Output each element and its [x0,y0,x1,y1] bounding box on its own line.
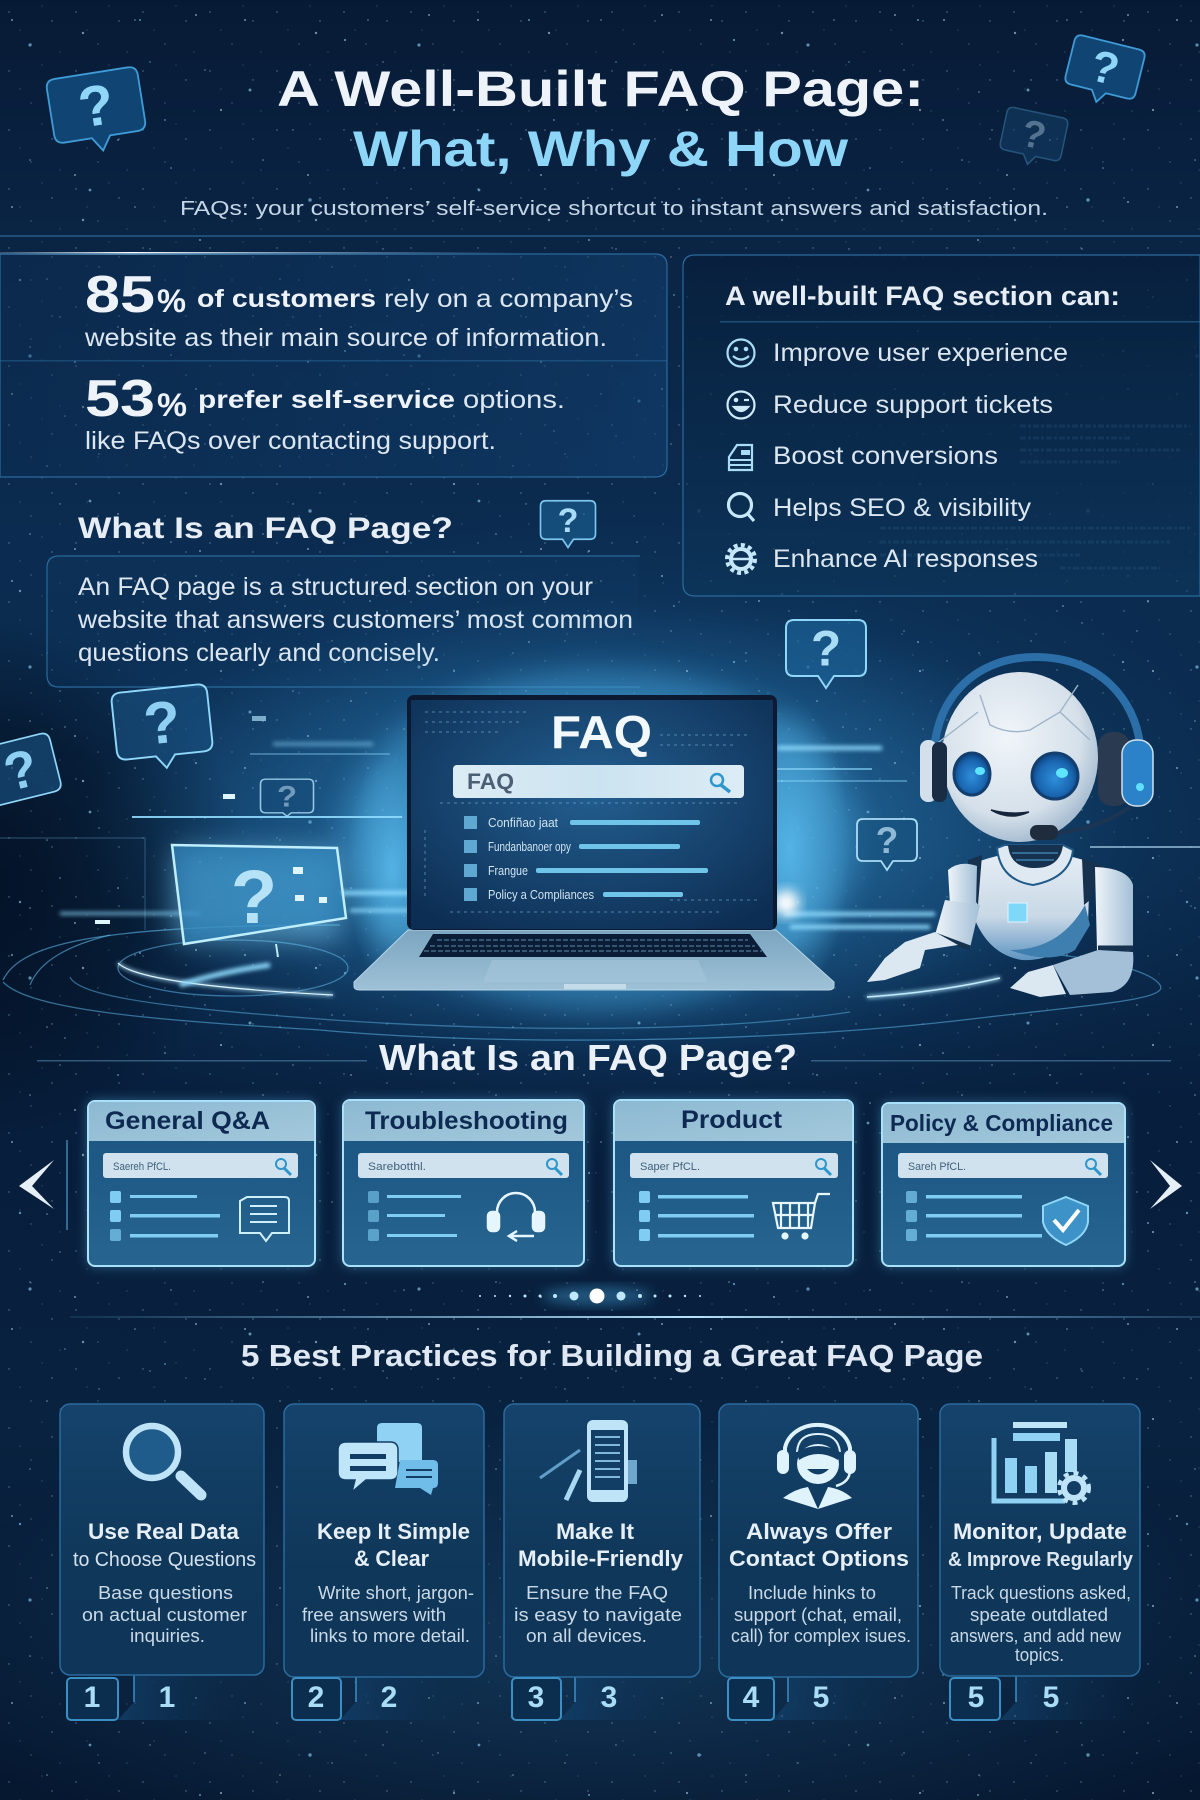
card search [630,1153,838,1178]
practice description: speate outdlated [970,1605,1108,1625]
benefit: AI responses: Enhance AI responses [773,545,1038,573]
practice 5: monitor and update [940,1404,1140,1720]
laptop screen [407,695,777,930]
icon: chart and gear [994,1422,1089,1503]
practice title: Make It [556,1519,635,1544]
practice description: inquiries. [130,1626,205,1646]
card title: General Q&A [105,1107,270,1135]
title: What, Why & How [353,121,848,177]
stat: 53 percent: options. [463,386,565,414]
practice 1: use real data [60,1404,264,1720]
icon: chat [240,1197,289,1241]
card: Policy & Compliance [882,1103,1125,1266]
card search: Saereh PfCL. [113,1161,171,1173]
hero light streaks [60,670,1200,1010]
icon: glass question screen [172,845,346,957]
FAQ list: Frangue [488,863,528,878]
icon: smile [728,340,754,366]
practice card [60,1404,264,1675]
icon: question bubble near robot: ? [876,819,898,861]
number tab: 2 [381,1681,397,1714]
practice description [82,1583,247,1646]
benefit: user experience: Improve user experience [773,339,1068,367]
icon: question bubble small [540,501,596,548]
card title: Policy & Compliance [890,1110,1113,1136]
search bar [453,765,744,798]
FAQ list: Fundanbanoer opy [488,839,571,854]
card search: Saper PfCL. [640,1161,700,1173]
practice title: Keep It Simple [317,1519,470,1544]
card: Troubleshooting [343,1100,584,1266]
practice 3: mobile friendly [504,1404,700,1720]
icon: magnifier [728,494,754,521]
number badge [67,1678,118,1720]
title [277,61,924,177]
stat: 53 percent [85,370,565,455]
number badge [728,1678,774,1720]
heading: what is an FAQ page, section: What Is an FAQ Page? [379,1037,797,1078]
card list [639,1191,754,1241]
panel: FAQ definition [47,556,640,687]
stat: 85 percent: rely on a company’s [384,285,633,313]
icon: question bubble top left [46,66,149,158]
icon: question bubble mid right [786,620,866,688]
stat: 85 percent: % [157,283,186,319]
icon: gear [727,545,755,573]
heading: best practices: 5 Best Practices for Building a Great FAQ Page [241,1338,983,1373]
number tab: 5 [813,1681,829,1714]
practice description [731,1583,911,1646]
icon: happy face [728,392,754,418]
stat: 85 percent: of customers [197,285,376,313]
card title: Product [681,1106,783,1134]
stat: 53 percent: prefer self-service [198,386,455,414]
number tab [118,1675,264,1720]
practice card [719,1404,918,1677]
card: Product [614,1100,853,1266]
panel: benefits [683,255,1200,596]
practice subtitle: & Improve Regularly [948,1549,1134,1571]
practice description: on actual customer [82,1605,247,1625]
number badge: 3 [528,1681,544,1714]
practice description [950,1583,1131,1665]
practice 2: keep it simple [284,1404,484,1720]
number badge: 2 [308,1681,324,1714]
practice description: is easy to navigate [514,1605,682,1625]
robot torso and arms [935,845,1133,995]
practice description [514,1583,682,1646]
card search [898,1153,1108,1178]
icon: dim question bubble top right [997,106,1069,171]
carousel dots [479,1287,701,1305]
arrow: next [1150,1160,1182,1209]
laptop [354,695,834,990]
search bar: FAQ [467,769,514,794]
heading: what is an FAQ page, small: What Is an FAQ Page? [78,512,453,545]
number tab: 1 [159,1681,175,1714]
practice description: Ensure the FAQ [526,1583,668,1603]
number tab [773,1676,918,1720]
icon: question bubble near robot [857,819,917,870]
practice subtitle: Mobile-Friendly [518,1546,684,1571]
practice description: call) for complex isues. [731,1626,911,1646]
icon: chat bubbles [338,1423,438,1495]
number tab [1000,1675,1140,1720]
practice subtitle: to Choose Questions [73,1549,256,1571]
card list [906,1191,1042,1241]
card search: Sarebotthl. [368,1161,426,1173]
icon: headset [488,1193,544,1241]
number tab: 3 [601,1681,617,1714]
icon: phone [540,1420,637,1502]
icon: cart [773,1194,830,1238]
practice description: Track questions asked, [951,1583,1131,1603]
icon: question bubble small dim [260,779,314,816]
number badge [950,1678,1000,1720]
card title: Troubleshooting [365,1107,568,1135]
laptop base [354,930,834,990]
practice description: Base questions [98,1583,233,1603]
stat: 85 percent: website as their main source of information. [84,324,607,352]
icon: glass question screen: ? [231,855,277,940]
practice card [504,1404,700,1677]
practice title: Use Real Data [88,1519,240,1544]
panel: FAQ definition: website that answers customers’ most common [77,606,633,634]
stat: 53 percent: 53 [85,370,155,428]
robot [867,657,1153,997]
robot headset band [934,657,1140,768]
practice description: Write short, jargon- [318,1583,474,1603]
number badge: 1 [84,1681,100,1714]
icon: question bubble top left: ? [74,72,118,141]
icon: magnifier [126,1426,201,1495]
practice description [302,1583,474,1646]
card: General Q&A [88,1101,315,1266]
practice subtitle: Contact Options [729,1546,909,1571]
practice description: answers, and add new [950,1626,1122,1646]
icon: question bubble left [111,684,215,773]
stat: 53 percent: % [157,387,187,423]
robot left earcup [920,740,947,802]
screen title: FAQ [551,706,652,758]
icon: dim question bubble top right: ? [1018,112,1050,159]
stat: 85 percent: 85 [85,266,155,324]
practice card [940,1404,1140,1676]
number tab [340,1676,484,1720]
icon: calculator [729,445,752,470]
panel: FAQ definition: questions clearly and concisely. [78,639,440,667]
number badge: 4 [743,1681,760,1714]
stat: 53 percent: like FAQs over contacting support. [85,427,496,455]
robot microphone [1030,807,1130,840]
icon: support agent [777,1425,856,1509]
practice description: topics. [1015,1645,1064,1665]
benefit: SEO: Helps SEO & visibility [773,494,1032,522]
icon: question bubble mid right: ? [811,621,841,677]
icon: shield [1043,1197,1088,1245]
practice description: on all devices. [526,1626,647,1646]
practice card [284,1404,484,1677]
number tab: 5 [1043,1681,1059,1714]
benefit: support tickets: Reduce support tickets [773,391,1053,419]
card search [358,1153,569,1178]
robot mouth [991,810,1029,816]
number badge: 5 [968,1681,984,1714]
subtitle: FAQs: your customers’ self-service shortcut to instant answers and satisfaction. [180,198,1048,220]
practice title: Monitor, Update [953,1519,1127,1544]
robot head [920,672,1153,842]
FAQ list: Policy a Compliances [488,887,594,902]
benefit: conversions: Boost conversions [773,442,998,470]
card list [368,1191,461,1241]
panel: statistics [0,254,667,477]
number badge [292,1678,341,1720]
robot eyes [954,753,1078,799]
card list [110,1191,220,1241]
benefits heading: A well-built FAQ section can: [725,281,1120,311]
card search: Sareh PfCL. [908,1161,966,1173]
title: A Well-Built FAQ Page: [277,61,924,117]
panel: FAQ definition: An FAQ page is a structured section on your [78,573,593,601]
stat: 85 percent [84,266,633,352]
practice description: links to more detail. [310,1626,470,1646]
icon: question bubble small: ? [558,502,578,540]
icon: question bubble left: ? [140,687,184,758]
practice 4: contact options [719,1404,918,1720]
practice description: Include hinks to [748,1583,876,1603]
card search [103,1153,298,1178]
practice description: support (chat, email, [734,1605,902,1625]
robot hands [867,932,1066,997]
icon: question bubble top right [1061,34,1146,111]
hero floor rings [0,600,1161,1060]
robot right earcup [1098,732,1153,806]
FAQ list [464,815,708,902]
icon: question bubble left edge [0,732,63,811]
number tab [560,1676,700,1720]
practice title: Always Offer [746,1519,892,1544]
icon: question bubble top right: ? [1086,41,1124,95]
section divider [70,1316,1200,1318]
arrow: previous [19,1140,68,1230]
practice description: free answers with [302,1605,446,1625]
icon: question bubble small dim: ? [277,780,297,813]
header divider [0,235,1200,255]
number badge [512,1678,561,1720]
practice subtitle: & Clear [354,1546,429,1571]
FAQ list: Confiñao jaat [488,815,558,830]
